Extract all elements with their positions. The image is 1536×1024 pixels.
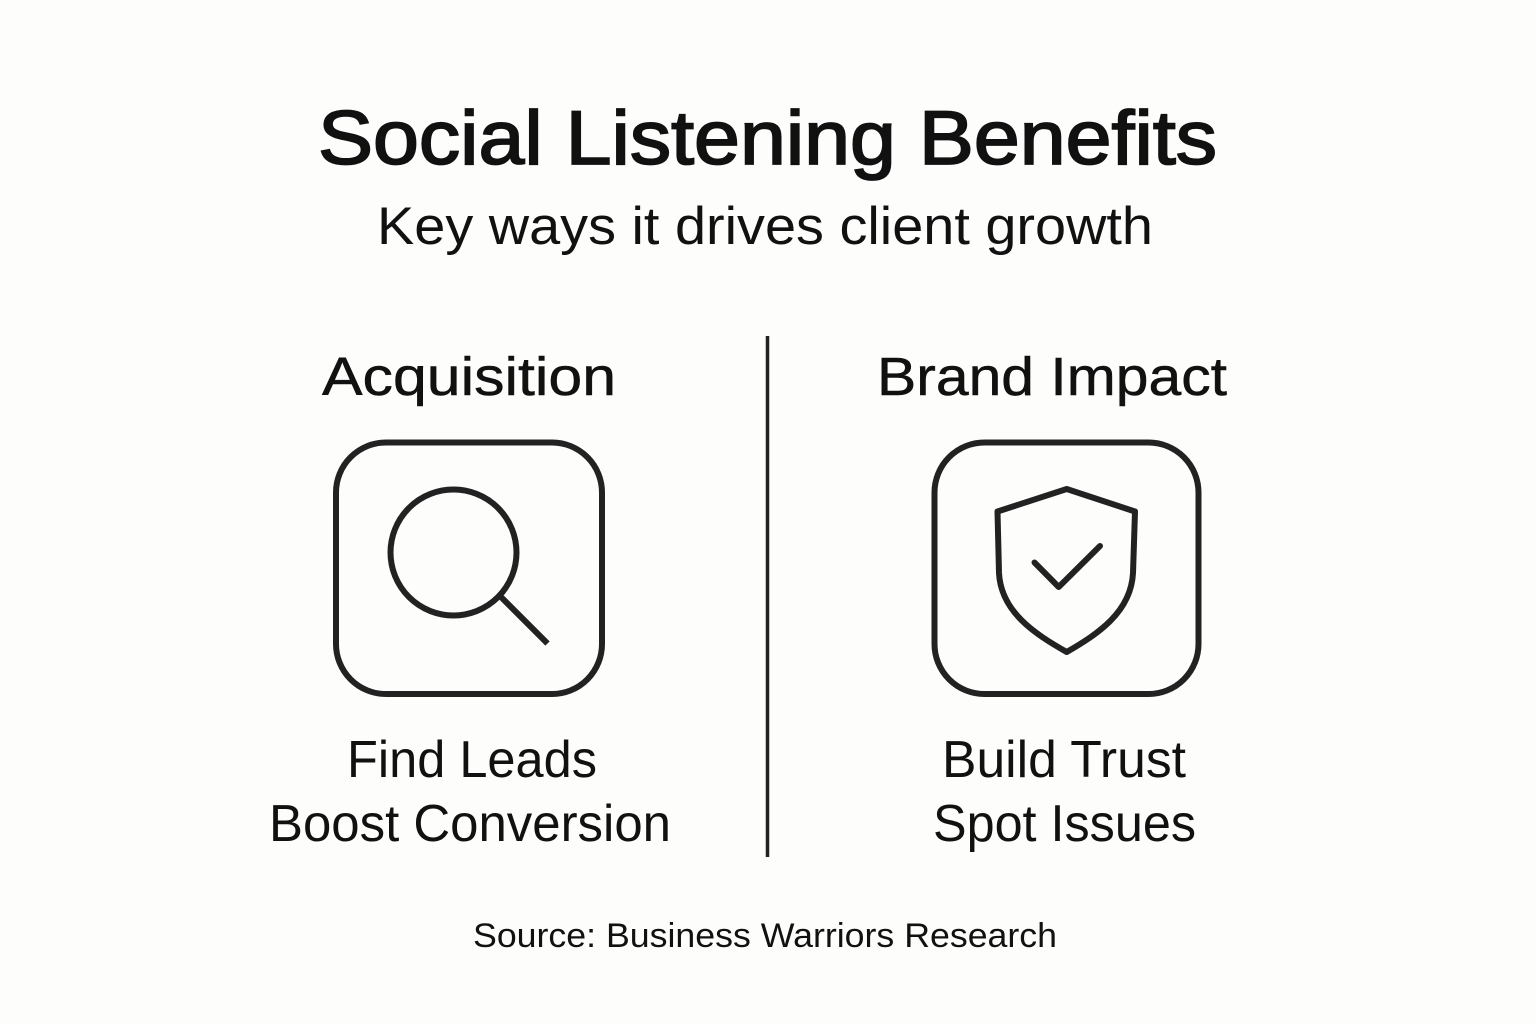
title: Social Listening Benefits	[318, 96, 1217, 181]
benefits list: brand impact: Build Trust	[942, 731, 1187, 789]
panel: brand impact	[877, 347, 1227, 853]
panel: acquisition	[269, 347, 671, 853]
icon: magnifying glass in rounded square	[336, 442, 602, 694]
heading: brand impact: Brand Impact	[877, 347, 1227, 407]
center divider	[766, 336, 769, 857]
benefits list: brand impact	[933, 731, 1196, 853]
icon: shield with checkmark in rounded square	[934, 442, 1198, 694]
benefits list: acquisition: Boost Conversion	[269, 795, 671, 853]
subtitle: Key ways it drives client growth	[377, 197, 1153, 256]
source note: Source: Business Warriors Research	[473, 917, 1057, 955]
heading: acquisition: Acquisition	[322, 347, 616, 407]
benefits list: brand impact: Spot Issues	[933, 795, 1196, 853]
benefits list: acquisition: Find Leads	[347, 731, 597, 789]
benefits list: acquisition	[269, 731, 671, 853]
